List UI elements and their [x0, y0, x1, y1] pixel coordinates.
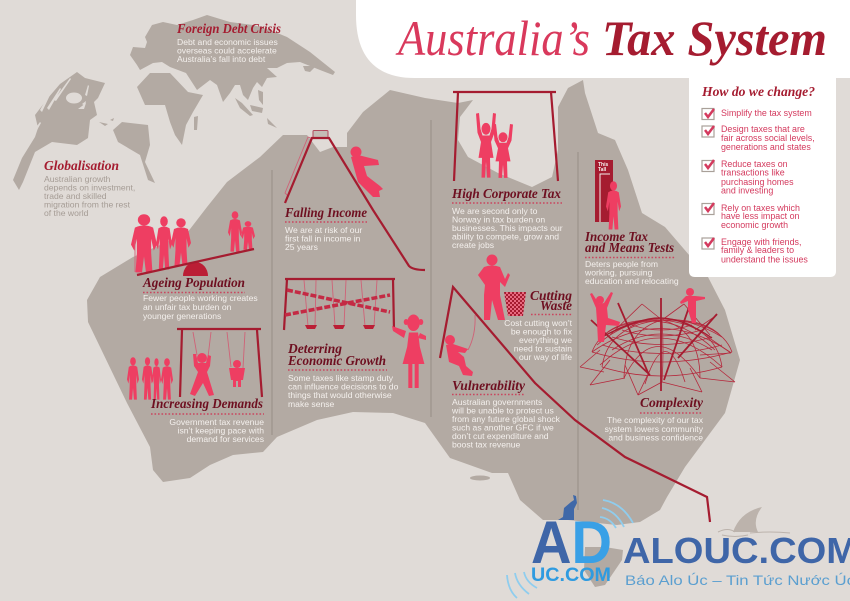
panel: cutting waste: Waste [540, 299, 572, 314]
panel: cutting waste [478, 254, 573, 362]
panel: cutting waste: need to sustain [514, 344, 572, 354]
panel: income tax and means tests: and Means Tests [585, 241, 675, 256]
panel: complexity: The complexity of our tax [607, 415, 704, 425]
panel: falling income: Falling Income [284, 206, 367, 221]
panel: increasing demands: demand for services [187, 434, 264, 444]
panel: globalisation: migration from the rest [44, 200, 131, 210]
panel: vulnerability: such as another GFC if we [452, 422, 554, 432]
panel: ageing population: an unfair tax burden on [143, 302, 232, 312]
logo mark: AD [531, 509, 612, 576]
panel: cutting waste: Cutting [530, 289, 572, 304]
panel: deterring economic growth: things that would otherwise [288, 390, 392, 400]
illustration: man and bin [478, 254, 526, 320]
checklist item: reduce: purchasing homes [721, 177, 794, 187]
checklist item: simplify: Simplify the tax system [721, 108, 812, 118]
illustration: swing frame and children [453, 92, 558, 181]
panel: vulnerability [440, 287, 710, 522]
illustration: height chart and child: Tall [598, 167, 607, 173]
title: Australia’s [395, 10, 590, 66]
panel: complexity: system lowers community [605, 424, 704, 434]
checklist item: rely: have less impact on [721, 211, 800, 221]
checklist item: engage: understand the issues [721, 254, 808, 264]
panel: income tax and means tests: Deters people from [585, 259, 658, 269]
watermark logo [507, 495, 850, 598]
site name: ALOUC.COM [623, 530, 850, 571]
checklist item: rely: Rely on taxes which [721, 203, 800, 213]
panel: complexity [580, 288, 735, 442]
panel: increasing demands: Increasing Demands [150, 397, 264, 412]
panel: high corporate tax: businesses. This impacts our [452, 223, 563, 233]
panel: globalisation: Australian growth [44, 174, 111, 184]
panel: increasing demands: Government tax revenue [169, 417, 264, 427]
panel: ageing population: Ageing Population [142, 276, 245, 291]
panel: complexity: and business confidence [608, 432, 703, 442]
panel: vulnerability: don’t cut expenditure and [452, 431, 549, 441]
panel: globalisation [44, 159, 135, 218]
panel: ageing population: younger generations [143, 311, 221, 321]
panel: high corporate tax: Norway in tax burden on [452, 214, 545, 224]
map of Australia [87, 80, 740, 525]
illustration: height chart and child [595, 160, 621, 230]
panel: vulnerability: Australian governments [452, 397, 542, 407]
icon: kangaroo [558, 495, 577, 520]
checklist item: rely: economic growth [721, 220, 788, 230]
panel: ageing population: Fewer people working creates [143, 293, 258, 303]
panel: vulnerability: Vulnerability [452, 379, 526, 394]
illustration: swing set and queue [127, 329, 262, 400]
checklist item: design: fair across social levels, [721, 133, 815, 143]
panel: globalisation: depends on investment, [44, 182, 135, 192]
panel: high corporate tax: High Corporate Tax [451, 187, 561, 202]
illustration: long slide and child on swing [440, 287, 710, 522]
checklist item: reduce: and investing [721, 186, 773, 196]
panel: deterring economic growth [284, 279, 426, 409]
panel: deterring economic growth: make sense [288, 399, 335, 409]
panel: falling income: We are at risk of our [285, 225, 362, 235]
panel: globalisation: of the world [44, 208, 89, 218]
tagline: Báo Alo Úc – Tin Tức Nước Úc [625, 572, 850, 588]
panel: high corporate tax: create jobs [452, 240, 494, 250]
checklist item: reduce: Reduce taxes on [721, 159, 788, 169]
title banner [356, 0, 850, 78]
panel: increasing demands [127, 329, 264, 444]
panel: falling income [284, 130, 425, 270]
panel: vulnerability: boost tax revenue [452, 440, 521, 450]
sidebar heading: How do we change? [701, 85, 815, 100]
illustration: slide [285, 130, 425, 270]
panel: foreign debt crisis: Australia’s fall into debt [177, 54, 266, 64]
panel: vulnerability: will be unable to protect us [451, 406, 554, 416]
checklist item: design: generations and states [721, 142, 811, 152]
panel: income tax and means tests: Income Tax [584, 230, 648, 245]
island and Tasmania [470, 476, 623, 587]
panel: income tax and means tests: working, pursuing [584, 268, 653, 278]
title: Tax System [602, 10, 827, 66]
icon: signal arcs [507, 500, 633, 598]
panel: deterring economic growth: Economic Growth [287, 354, 386, 369]
vertical dividers [272, 120, 578, 510]
panel: globalisation: Globalisation [44, 159, 119, 174]
panel: falling income: first fall in income in [285, 234, 361, 244]
panel: deterring economic growth: can influence decisions to do [288, 382, 399, 392]
illustration: seesaw with people [131, 211, 255, 276]
panel: high corporate tax: We are second only to [452, 206, 538, 216]
panel: increasing demands: isn’t keeping pace with [178, 426, 264, 436]
checklist item: engage [702, 237, 808, 264]
panel: cutting waste: everything we [519, 335, 572, 345]
panel: how do we change [689, 78, 836, 277]
panel: high corporate tax [451, 92, 563, 250]
panel: foreign debt crisis [176, 22, 281, 64]
detail: Hudson Bay and northern channels [34, 78, 89, 132]
panel: foreign debt crisis: Foreign Debt Crisis [176, 22, 281, 37]
icon: shark fin [718, 507, 790, 536]
panel: foreign debt crisis: Debt and economic issues [177, 37, 278, 47]
panel: ageing population [131, 211, 258, 321]
panel: complexity: Complexity [640, 396, 704, 411]
panel: cutting waste: our way of life [519, 352, 572, 362]
panel: foreign debt crisis: overseas could accelerate [177, 46, 277, 56]
checklist item: reduce [702, 159, 794, 196]
panel: income tax and means tests [584, 160, 679, 286]
checklist item: rely [702, 203, 800, 230]
panel: globalisation: trade and skilled [44, 191, 107, 201]
checklist item: design: Design taxes that are [721, 124, 805, 134]
illustration: tangled climbing dome [580, 288, 735, 395]
panel: high corporate tax: ability to compete, grow and [452, 232, 559, 242]
checklist item: reduce: transactions like [721, 168, 785, 178]
checklist item: engage: family & leaders to [721, 245, 794, 255]
checklist item: design [702, 124, 815, 152]
checklist item: engage: Engage with friends, [721, 237, 801, 247]
illustration: taped-off swings and girl [284, 279, 426, 388]
panel: vulnerability: from any future global shock [452, 414, 561, 424]
logo subtext: UC.COM [531, 565, 611, 586]
illustration: height chart and child: This [598, 162, 608, 168]
world map [13, 15, 335, 190]
panel: deterring economic growth: Deterring [287, 342, 342, 357]
panel: cutting waste: Cost cutting won’t [504, 318, 573, 328]
panel: falling income: 25 years [285, 242, 318, 252]
panel: income tax and means tests: education and relocating [585, 276, 679, 286]
panel: deterring economic growth: Some taxes like stamp duty [288, 373, 394, 383]
panel: cutting waste: be enough to fix [511, 326, 573, 336]
